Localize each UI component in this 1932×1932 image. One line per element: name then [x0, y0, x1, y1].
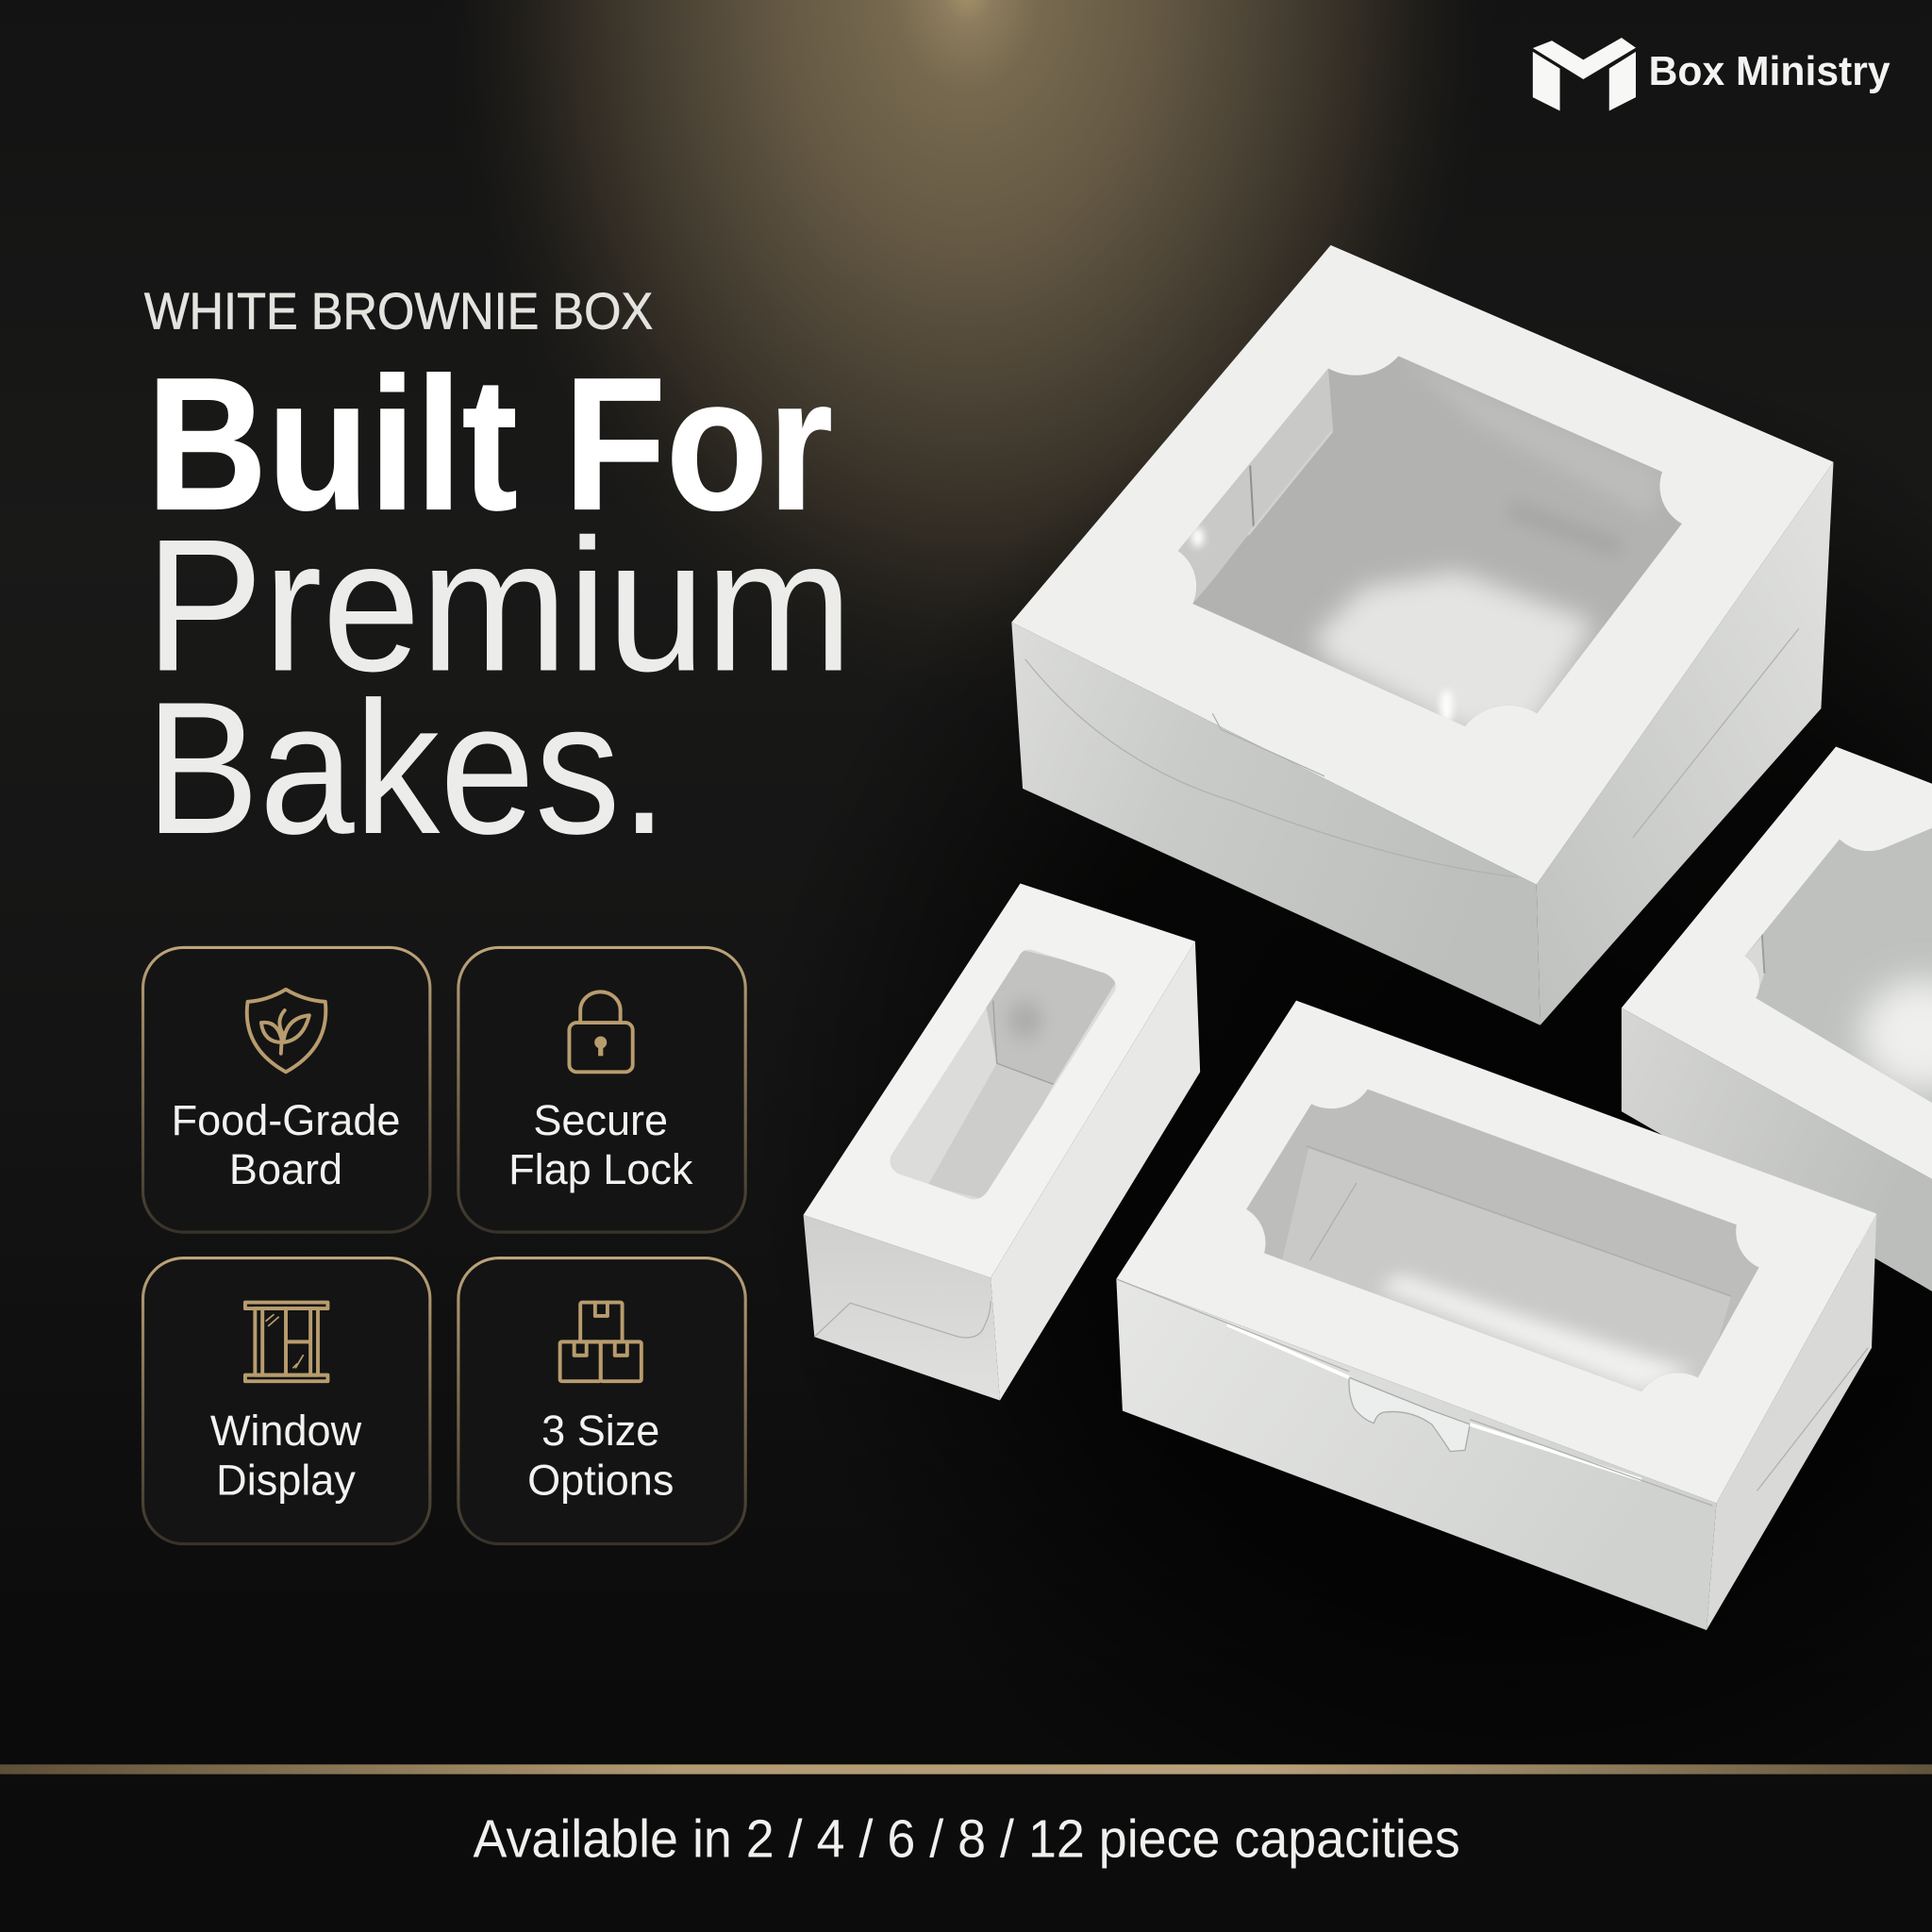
- eyebrow heading: WHITE BROWNIE BOX: [144, 282, 653, 341]
- front face: [1011, 623, 1541, 1025]
- front face: [804, 1215, 1000, 1401]
- icon: stacked boxes: [560, 1303, 641, 1381]
- product: narrow box: [804, 883, 1200, 1401]
- side face: [1537, 462, 1834, 1025]
- front face: [1622, 1008, 1932, 1291]
- top face: [1011, 245, 1834, 885]
- side face: [991, 941, 1200, 1401]
- product: large square box: [1011, 245, 1834, 1025]
- logo wordmark: Box Ministry: [1649, 49, 1890, 94]
- logo mark: [1533, 38, 1636, 111]
- front face: [1116, 1279, 1716, 1630]
- product: right cropped box: [1622, 747, 1932, 1291]
- label: Options: [527, 1456, 674, 1504]
- feature card: secure flap lock: [458, 947, 745, 1232]
- window: [1177, 357, 1682, 726]
- flap details: [1212, 713, 1324, 776]
- label: 3 Size: [541, 1407, 659, 1455]
- main headline: Bakes.: [145, 663, 668, 874]
- icon: shield with leaf: [247, 990, 325, 1072]
- feature card: window display: [143, 1258, 430, 1544]
- top face: [804, 883, 1195, 1277]
- bottom flap: [814, 1301, 991, 1338]
- label: Board: [229, 1145, 342, 1193]
- capacities text: Available in 2 / 4 / 6 / 8 / 12 piece capacities: [474, 1808, 1460, 1868]
- top face: [1116, 1001, 1876, 1503]
- label: Flap Lock: [508, 1145, 693, 1193]
- brand logo: [1533, 38, 1890, 111]
- main headline: Premium: [145, 501, 853, 711]
- main headline: [145, 339, 853, 874]
- label: Food-Grade: [172, 1096, 400, 1144]
- icon: window: [245, 1303, 327, 1381]
- top face: [1622, 747, 1932, 1179]
- feature card: food-grade board: [143, 947, 430, 1232]
- product: medium rectangular box: [1116, 1001, 1876, 1630]
- label: Secure: [533, 1096, 668, 1144]
- label: Window: [210, 1407, 362, 1455]
- closure tab: [1349, 1377, 1470, 1452]
- main headline: Built For: [146, 339, 833, 549]
- side face: [1707, 1214, 1876, 1630]
- label: Display: [216, 1456, 356, 1504]
- gold divider bar: [0, 1764, 1932, 1774]
- icon: padlock: [569, 991, 633, 1072]
- window: [1246, 1089, 1758, 1392]
- feature card: 3 size options: [458, 1258, 745, 1544]
- window: [891, 949, 1116, 1200]
- footer band: [0, 1774, 1932, 1932]
- window: [1745, 828, 1932, 1103]
